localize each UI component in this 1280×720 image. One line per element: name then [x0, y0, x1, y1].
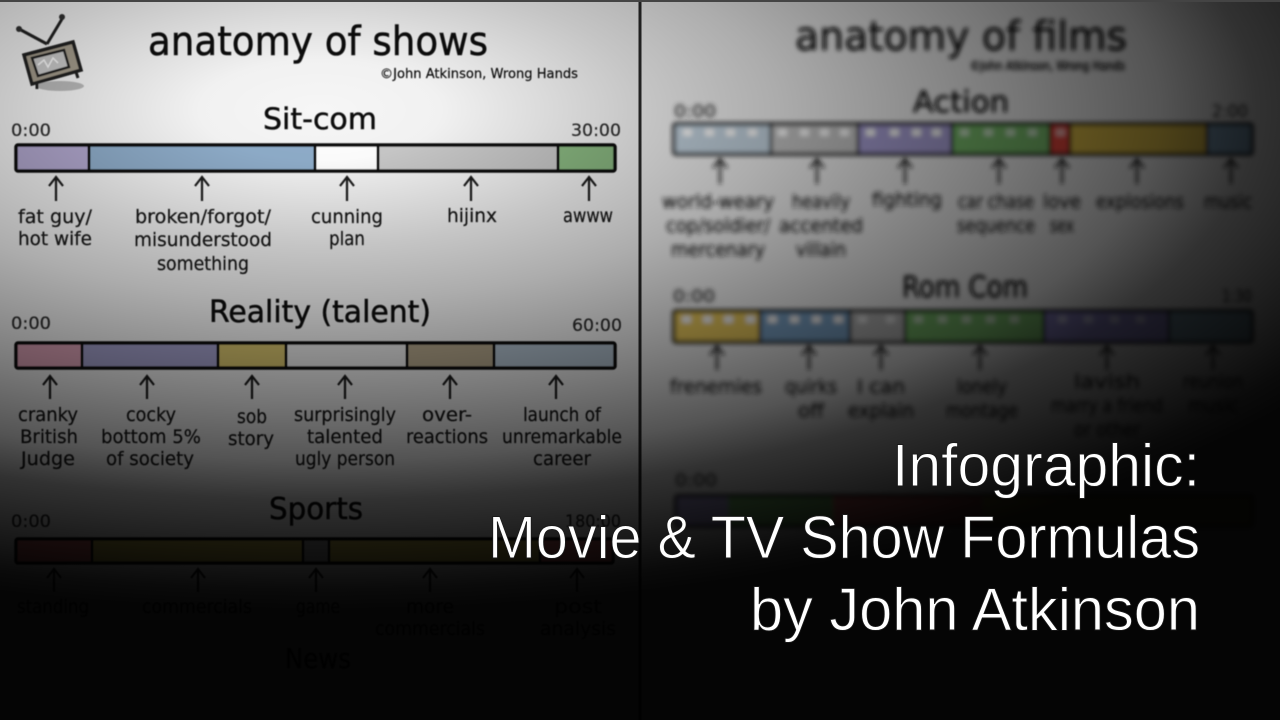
segment labels: lonely [957, 376, 1007, 398]
segment labels: Judge [20, 448, 75, 470]
heading: sit-com: Sit-com [263, 102, 377, 136]
section: third film genre [675, 471, 1252, 526]
segment labels [670, 371, 1243, 441]
segment labels: frenemies [670, 376, 762, 398]
time labels: 2:00 [1212, 102, 1248, 122]
segment labels: lavish [1074, 371, 1140, 393]
segment labels: commercials [375, 618, 485, 640]
segment labels: launch of [523, 404, 602, 426]
segment labels: something [157, 253, 249, 275]
segment labels: surprisingly [294, 404, 396, 426]
segment labels: post [554, 596, 602, 618]
segment labels: off [798, 400, 825, 422]
segment labels: awww [563, 205, 613, 227]
section: sports [11, 492, 621, 675]
segment labels: plan [329, 228, 365, 250]
section: action [662, 85, 1252, 261]
timeline bar: sports [16, 539, 613, 563]
icon: retro television [16, 14, 84, 91]
time labels: 0:00 [673, 287, 715, 307]
segment labels: or other [1074, 419, 1140, 441]
segment labels: talented [307, 426, 383, 448]
time labels: 0:00 [674, 102, 716, 122]
time labels: 60:00 [572, 316, 622, 336]
time labels [11, 314, 622, 336]
segment labels: over- [422, 404, 472, 426]
segment labels: music [1204, 191, 1252, 213]
arrows [43, 376, 563, 399]
headline line 1: Infographic: [892, 432, 1200, 499]
heading: next section: News [285, 642, 351, 675]
segment labels: British [20, 426, 78, 448]
segment labels [18, 205, 613, 275]
segment labels: sex [1050, 215, 1074, 237]
arrows [49, 177, 596, 201]
segment labels: bottom 5% [101, 426, 201, 448]
section: sit-com [11, 102, 621, 275]
title: anatomy of shows: anatomy of shows [148, 19, 488, 65]
timeline bar: third film genre [676, 496, 1252, 526]
segment labels: marry a friend [1051, 395, 1163, 417]
segment labels [662, 189, 1252, 261]
segment labels: unremarkable [502, 426, 622, 448]
segment labels: explain [848, 400, 914, 422]
headline line 2: Movie & TV Show Formulas [488, 504, 1200, 571]
segment labels: mercenary [671, 239, 765, 261]
time labels [674, 102, 1248, 122]
heading: sports: Sports [269, 492, 363, 527]
headline [488, 432, 1200, 643]
segment labels: fat guy/ [18, 206, 93, 228]
section: rom com [670, 270, 1252, 441]
time labels: 0:00 [11, 121, 51, 141]
segment labels: reunion [1183, 371, 1243, 393]
heading: action: Action [913, 85, 1009, 119]
segment labels: sob [237, 406, 267, 428]
time labels [11, 512, 621, 532]
panel: anatomy of shows [11, 14, 622, 675]
credit: ©John Atkinson, Wrong Hands [380, 66, 578, 82]
arrows [710, 346, 1220, 370]
segment labels [17, 596, 616, 640]
segment labels: explosions [1096, 191, 1184, 213]
film sprocket squares [682, 316, 1145, 323]
segment labels: commercials [142, 596, 252, 618]
segment labels: cocky [126, 404, 176, 426]
headline line 3: by John Atkinson [750, 576, 1200, 643]
segment labels: analysis [540, 618, 616, 640]
time labels [11, 121, 621, 141]
segment labels: sequence [957, 215, 1035, 237]
time labels: 0:00 [11, 314, 51, 334]
heading: rom com: Rom Com [902, 270, 1028, 304]
segment labels: more [406, 596, 454, 618]
timeline bar: reality [16, 343, 615, 368]
timeline bar: sit-com [16, 145, 615, 171]
time labels [673, 287, 1252, 307]
segment labels: of society [106, 448, 194, 470]
segment labels: hijinx [447, 205, 497, 227]
time labels: 0:00 [11, 512, 51, 532]
segment labels: music [1188, 395, 1238, 417]
segment labels: world-weary [662, 191, 774, 213]
arrows [713, 159, 1238, 184]
segment labels: quirks [785, 376, 837, 398]
panel divider [638, 0, 642, 720]
timeline bar: action [674, 124, 1252, 154]
heading: reality (talent): Reality (talent) [209, 295, 431, 330]
segment labels: career [533, 448, 591, 470]
segment labels: fighting [872, 189, 942, 211]
segment labels: broken/forgot/ [135, 206, 272, 228]
segment labels: car chase [958, 191, 1034, 213]
time label: 0:00 [675, 471, 717, 491]
segment labels: heavily [792, 191, 850, 213]
panel: anatomy of films (blurred) [662, 14, 1252, 526]
segment labels: I can [857, 376, 905, 398]
segment labels: love [1043, 191, 1081, 213]
segment labels: story [228, 428, 274, 450]
arrows [47, 569, 584, 592]
segment labels: hot wife [18, 228, 92, 250]
segment labels: reactions [406, 426, 488, 448]
segment labels: cranky [18, 404, 78, 426]
segment labels [18, 404, 622, 470]
segment labels: game [296, 596, 340, 618]
film sprocket squares [683, 129, 1065, 136]
segment labels: villain [796, 239, 846, 261]
segment labels: cunning [311, 206, 383, 228]
timeline bar: rom com [674, 311, 1252, 342]
segment labels: standing [17, 596, 89, 618]
time labels: 30:00 [571, 121, 621, 141]
section: reality [11, 295, 622, 470]
time labels: 180:00 [565, 512, 621, 532]
segment labels: montage [946, 400, 1018, 422]
title: anatomy of films: anatomy of films [795, 14, 1127, 60]
segment labels: misunderstood [134, 229, 272, 251]
credit: ©John Atkinson, Wrong Hands [970, 59, 1125, 73]
segment labels: cop/soldier/ [666, 215, 771, 237]
segment labels: accented [779, 215, 863, 237]
time labels: 1:30 [1222, 287, 1252, 307]
segment labels: ugly person [295, 448, 395, 470]
